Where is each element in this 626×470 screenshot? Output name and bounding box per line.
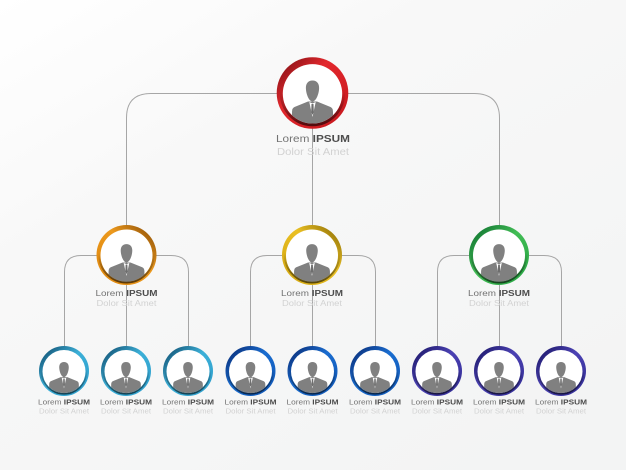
icon: person	[49, 362, 79, 394]
label	[281, 288, 343, 308]
node: staff 5	[286, 346, 338, 416]
node: staff 3	[162, 346, 214, 416]
node: staff 6	[349, 346, 401, 416]
node: manager green	[468, 225, 530, 308]
label: Dolor Sit Amet	[101, 406, 151, 416]
node: staff 1	[38, 346, 90, 416]
node: manager gold	[281, 225, 343, 308]
label: Dolor Sit Amet	[536, 406, 586, 416]
label: Lorem IPSUM	[473, 398, 525, 406]
label	[535, 398, 587, 416]
node: staff 4	[224, 346, 276, 416]
icon: person	[481, 244, 517, 283]
label: Lorem IPSUM	[281, 288, 343, 298]
label	[38, 398, 90, 416]
label	[276, 133, 350, 158]
icon: person	[360, 362, 390, 394]
label: Lorem IPSUM	[38, 398, 90, 406]
icon: person	[298, 362, 327, 394]
label	[473, 398, 525, 416]
label	[468, 288, 530, 308]
node: staff 2	[100, 346, 152, 416]
label: Lorem IPSUM	[100, 398, 152, 406]
label: Dolor Sit Amet	[469, 298, 530, 308]
node: staff 7	[411, 346, 463, 416]
node: staff 8	[473, 346, 525, 416]
label	[349, 398, 401, 416]
label: Dolor Sit Amet	[282, 298, 343, 308]
icon: person	[294, 244, 330, 283]
icon: person	[292, 80, 333, 125]
icon: person	[109, 244, 144, 283]
label: Dolor Sit Amet	[96, 298, 157, 308]
label: Lorem IPSUM	[276, 133, 350, 145]
label: Lorem IPSUM	[468, 288, 530, 298]
icon: person	[236, 362, 265, 394]
connector lines	[64, 94, 562, 347]
label: Dolor Sit Amet	[288, 406, 338, 416]
icon: person	[546, 362, 576, 394]
icon: person	[484, 362, 514, 394]
label: Dolor Sit Amet	[226, 406, 276, 416]
node: staff 9	[535, 346, 587, 416]
node: top executive	[276, 57, 350, 158]
icon: person	[111, 362, 141, 394]
label: Lorem IPSUM	[162, 398, 214, 406]
label: Dolor Sit Amet	[474, 406, 524, 416]
label: Lorem IPSUM	[411, 398, 463, 406]
label	[96, 288, 158, 308]
label: Lorem IPSUM	[224, 398, 276, 406]
label: Lorem IPSUM	[535, 398, 587, 406]
label: Dolor Sit Amet	[39, 406, 89, 416]
label	[224, 398, 276, 416]
label: Dolor Sit Amet	[277, 146, 349, 158]
label: Lorem IPSUM	[286, 398, 338, 406]
label: Dolor Sit Amet	[412, 406, 462, 416]
label: Dolor Sit Amet	[163, 406, 213, 416]
label: Dolor Sit Amet	[350, 406, 400, 416]
label: Lorem IPSUM	[349, 398, 401, 406]
label: Lorem IPSUM	[96, 288, 158, 298]
label	[162, 398, 214, 416]
node: manager orange	[96, 225, 158, 308]
icon: person	[422, 362, 452, 394]
label	[100, 398, 152, 416]
label	[286, 398, 338, 416]
label	[411, 398, 463, 416]
icon: person	[173, 362, 203, 394]
